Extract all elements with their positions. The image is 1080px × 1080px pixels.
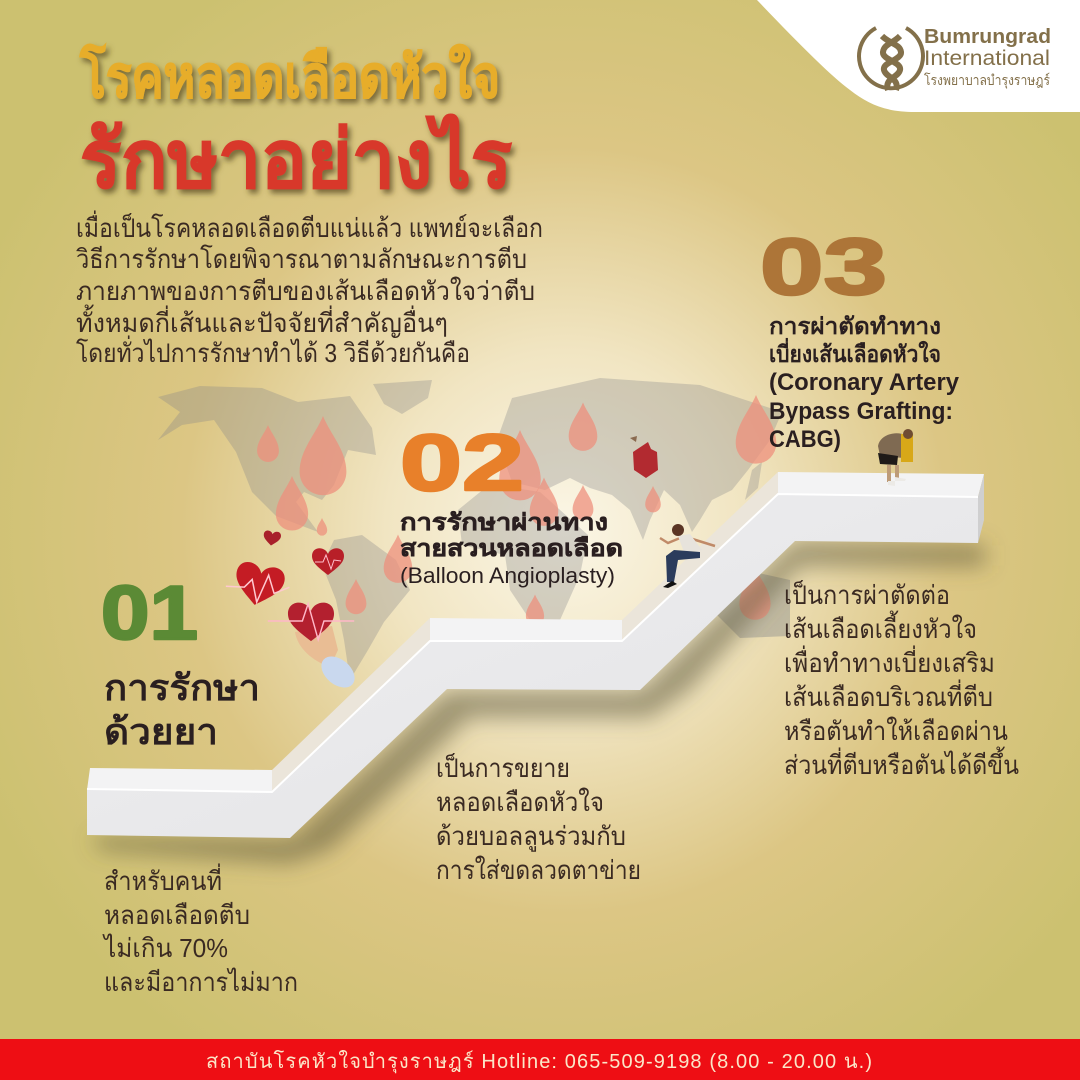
hand with sleeve bbox=[295, 626, 361, 694]
logo wordmark: Bumrungrad bbox=[924, 26, 1051, 48]
staircase bbox=[87, 472, 985, 864]
stair front face bbox=[87, 494, 978, 838]
drop bbox=[530, 478, 558, 526]
drop bbox=[645, 486, 661, 512]
title bbox=[79, 42, 512, 204]
step 2 description: การใส่ขดลวดตาข่าย bbox=[436, 855, 641, 885]
drop bbox=[739, 567, 771, 620]
drop bbox=[300, 416, 346, 495]
step 1 bbox=[101, 571, 298, 997]
drop bbox=[317, 518, 327, 536]
intro paragraph: วิธีการรักษาโดยพิจารณาตามลักษณะการตีบ bbox=[76, 244, 527, 274]
map: Eurasia bbox=[497, 378, 782, 540]
intro paragraph: โดยทั่วไปการรักษาทำได้ 3 วิธีด้วยกันคือ bbox=[76, 335, 470, 368]
woman arms bbox=[660, 537, 715, 546]
drop bbox=[257, 425, 279, 462]
man shorts bbox=[878, 453, 898, 465]
step 3 heading: เบี่ยงเส้นเลือดหัวใจ bbox=[769, 337, 941, 367]
step 1 description: ไม่เกิน 70% bbox=[102, 933, 228, 963]
step 3 bbox=[760, 222, 1019, 780]
man head bbox=[903, 429, 913, 439]
step 3 description: เป็นการผ่าตัดต่อ bbox=[784, 579, 950, 610]
drop bbox=[736, 395, 776, 464]
map: North America bbox=[158, 386, 376, 532]
stair top surface slopes bbox=[272, 472, 778, 792]
step 2 description bbox=[436, 752, 641, 885]
hearts illustration bbox=[223, 530, 361, 694]
footer bar bbox=[0, 1039, 1080, 1080]
map: Australia bbox=[712, 570, 790, 638]
logo thai name: โรงพยาบาลบำรุงราษฎร์ bbox=[924, 72, 1050, 89]
step 3 description: เส้นเลือดเลี้ยงหัวใจ bbox=[784, 610, 977, 644]
number 03: 03 bbox=[760, 222, 887, 311]
step 2 description: หลอดเลือดหัวใจ bbox=[436, 787, 604, 817]
woman top bbox=[678, 534, 702, 552]
intro paragraph bbox=[76, 210, 543, 368]
drop bbox=[346, 579, 366, 614]
man resting bbox=[878, 429, 913, 486]
step 1 description bbox=[102, 863, 298, 997]
number 02: 02 bbox=[400, 418, 524, 507]
drop bbox=[384, 534, 412, 583]
intro paragraph: ภายภาพของการตีบของเส้นเลือดหัวใจว่าตีบ bbox=[76, 276, 535, 306]
intro paragraph: ทั้งหมดกี่เส้นและปัจจัยที่สำคัญอื่นๆ bbox=[76, 304, 448, 338]
sleeve bbox=[315, 650, 361, 694]
corner logo panel bbox=[757, 0, 1080, 112]
step 1 description: หลอดเลือดตีบ bbox=[104, 900, 250, 930]
step 2 heading: (Balloon Angioplasty) bbox=[400, 563, 615, 588]
map: Greenland bbox=[373, 380, 432, 414]
step 1 heading: ด้วยยา bbox=[104, 711, 218, 752]
heart small bbox=[262, 530, 282, 547]
man shoes bbox=[888, 477, 906, 486]
man torso bbox=[878, 433, 906, 458]
logo emblem bbox=[859, 28, 923, 90]
step 3 description: เพื่อทำทางเบี่ยงเสริม bbox=[784, 645, 995, 678]
step 1 description: สำหรับคนที่ bbox=[104, 863, 222, 896]
title line 1: โรคหลอดเลือดหัวใจ bbox=[79, 42, 500, 110]
map: Japan bbox=[745, 462, 762, 500]
man towel bbox=[901, 434, 913, 462]
map: South America bbox=[322, 535, 410, 680]
step 2 heading bbox=[400, 509, 623, 588]
title line 2: รักษาอย่างไร bbox=[80, 113, 512, 204]
woman head bbox=[672, 524, 684, 536]
blood drops bbox=[257, 395, 776, 625]
heart right bbox=[312, 548, 344, 575]
hotline text: สถาบันโรคหัวใจบำรุงราษฎร์ Hotline: 065-509-9198 (8.00 - 20.00 น.) bbox=[206, 1050, 872, 1074]
map: Africa bbox=[458, 484, 588, 620]
intro paragraph: เมื่อเป็นโรคหลอดเลือดตีบแน่แล้ว แพทย์จะเลือก bbox=[76, 210, 543, 243]
man legs bbox=[889, 465, 897, 482]
step 2 bbox=[400, 418, 641, 885]
woman jeans bbox=[666, 550, 700, 582]
step 3 heading: (Coronary Artery bbox=[769, 369, 960, 396]
woman sliding bbox=[660, 524, 715, 588]
stair highlight bbox=[87, 494, 978, 792]
logo bbox=[859, 26, 1051, 90]
stair right side bbox=[978, 474, 984, 543]
step 1 heading: การรักษา bbox=[104, 667, 260, 708]
world map bbox=[158, 378, 790, 680]
step 2 heading: สายสวนหลอดเลือด bbox=[400, 535, 623, 561]
step 3 description: เส้นเลือดบริเวณที่ตีบ bbox=[784, 679, 993, 712]
step 3 description: ส่วนที่ตีบหรือตันได้ดีขึ้น bbox=[784, 746, 1019, 780]
drop bbox=[569, 402, 597, 451]
stair top surface flats bbox=[87, 472, 984, 792]
logo wordmark line 2: International bbox=[924, 47, 1050, 70]
step 3 heading: CABG) bbox=[769, 426, 841, 453]
hand bbox=[295, 626, 338, 667]
step 2 description: ด้วยบอลลูนร่วมกับ bbox=[436, 821, 626, 852]
stair shadow bbox=[92, 541, 985, 864]
step 3 description: หรือตันทำให้เลือดผ่าน bbox=[784, 716, 1008, 746]
drop bbox=[276, 476, 308, 531]
step 3 heading: Bypass Grafting: bbox=[769, 398, 953, 425]
step 3 heading bbox=[769, 313, 960, 453]
heart in hand bbox=[268, 603, 354, 641]
drop bbox=[573, 485, 593, 520]
heart left bbox=[223, 558, 293, 611]
drop bbox=[499, 430, 541, 500]
step 2 heading: การรักษาผ่านทาง bbox=[400, 509, 608, 535]
step 1 description: และมีอาการไม่มาก bbox=[104, 967, 298, 997]
step 3 description bbox=[784, 579, 1019, 780]
flying red heart organ bbox=[630, 436, 658, 478]
step 3 heading: การผ่าตัดทำทาง bbox=[769, 313, 941, 339]
step 2 description: เป็นการขยาย bbox=[436, 752, 570, 783]
woman shoes bbox=[663, 581, 677, 588]
drop bbox=[526, 594, 544, 625]
step 1 heading bbox=[104, 667, 260, 752]
number 01: 01 bbox=[101, 571, 198, 656]
